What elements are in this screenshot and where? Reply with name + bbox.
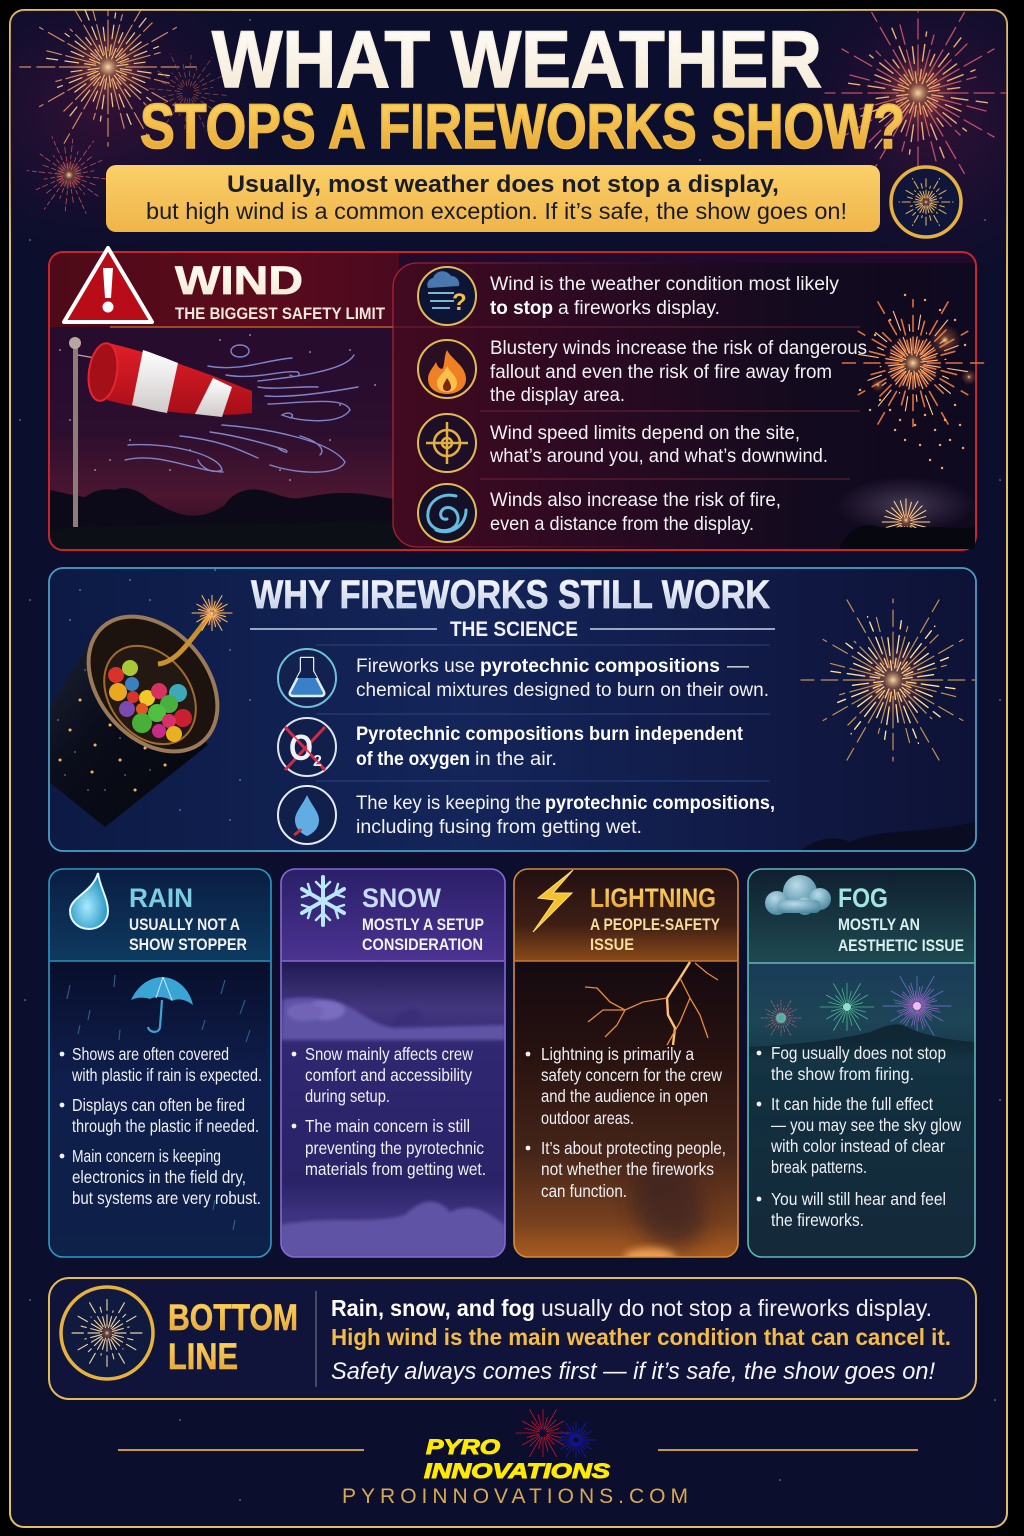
text: rain bullets (60, 1044, 262, 1208)
text: fog bullets: the fireworks. (771, 1210, 864, 1230)
illustration: fireworks in fog (749, 976, 974, 1056)
icon: crosshair (418, 414, 476, 472)
heading: bottom line: BOTTOM (168, 1297, 298, 1338)
text: snow bullets (292, 1044, 486, 1179)
subtitle banner (106, 165, 880, 232)
icon: flask (278, 649, 336, 707)
text: bottom line summary: Rain, snow, and fog (331, 1295, 535, 1321)
icon: no oxygen (278, 718, 336, 776)
icon: wind cloud with question mark: ? (452, 289, 467, 316)
text: science item 2: of the oxygen (356, 749, 470, 770)
heading: fog: AESTHETIC ISSUE (838, 936, 964, 955)
text: wind item 4: even a distance from the display. (490, 514, 754, 535)
icon: warning triangle (64, 248, 152, 322)
icon: rain drop (70, 873, 108, 929)
icon: snowflake (302, 877, 344, 925)
heading: why fireworks still work: THE SCIENCE (450, 618, 578, 641)
text: bottom line summary: High wind is the main weather condition that can cancel it. (331, 1324, 951, 1350)
text: lightning bullets: and the audience in open (541, 1086, 708, 1106)
text: science item 2: Pyrotechnic compositions burn independent (356, 724, 744, 745)
text: wind item 3: Wind speed limits depend on the site, (490, 423, 800, 444)
text: wind item 1: to stop (490, 298, 553, 319)
heading: fog (838, 883, 964, 955)
text: science item 1: pyrotechnic compositions (480, 656, 720, 677)
heading: fog: MOSTLY AN (838, 915, 920, 934)
text: fog bullets: with color instead of clear (770, 1136, 945, 1156)
text: wind item 1: Wind is the weather condition most likely (490, 274, 840, 295)
panel: bottom line (49, 1278, 976, 1399)
text: fog bullets: — you may see the sky glow (771, 1115, 961, 1135)
heading: lightning (590, 883, 721, 954)
heading: why fireworks still work: WHY FIREWORKS STILL WORK (251, 573, 770, 617)
text: rain bullets: with plastic if rain is expected. (71, 1065, 262, 1085)
text: fog bullets: Fog usually does not stop (771, 1043, 946, 1063)
heading: snow: CONSIDERATION (362, 935, 483, 954)
text: lightning bullets (526, 1044, 726, 1201)
text: wind item 1 (490, 274, 840, 319)
heading: bottom line: LINE (168, 1336, 238, 1377)
illustration: wind streaks (125, 345, 358, 472)
text: fog bullets: It can hide the full effect (771, 1094, 933, 1114)
text: snow bullets: comfort and accessibility (305, 1065, 472, 1085)
text: science item 3 (356, 793, 775, 838)
text: snow bullets: during setup. (305, 1086, 390, 1106)
heading: lightning: ISSUE (590, 935, 634, 954)
title: WHAT WEATHER (212, 15, 822, 105)
illustration: lightning strike (585, 962, 718, 1045)
panel: lightning (514, 869, 738, 1268)
icon: flame (418, 340, 476, 398)
text: science item 1: Fireworks use (356, 656, 475, 677)
heading: snow: SNOW (362, 883, 441, 913)
firework: wind panel (835, 295, 985, 552)
icon: wind cloud with question mark (418, 267, 476, 325)
text: bottom line summary (331, 1295, 951, 1385)
text: science item 3: pyrotechnic compositions, (545, 793, 775, 814)
icon: water drop (278, 786, 336, 844)
heading: wind: THE BIGGEST SAFETY LIMIT (175, 304, 386, 323)
panel: rain (49, 869, 271, 1257)
text: lightning bullets: outdoor areas. (541, 1108, 634, 1128)
text: wind item 1: a fireworks display. (558, 298, 720, 319)
text: science item 3: including fusing from getting wet. (356, 817, 642, 838)
text: science item 2: in the air. (475, 749, 557, 770)
heading: lightning: LIGHTNING (590, 883, 716, 913)
heading: snow (362, 883, 484, 954)
footer: website: PYROINNOVATIONS.COM (342, 1485, 688, 1508)
icon: firework medallion (891, 167, 961, 237)
illustration: windsock on pole (69, 337, 252, 527)
text: science item 3: The key is keeping the (356, 793, 541, 814)
heading: snow: MOSTLY A SETUP (362, 915, 484, 934)
panel: why fireworks still work (49, 568, 985, 851)
text: lightning bullets: It’s about protecting people, (541, 1138, 726, 1158)
subtitle banner: Usually, most weather does not stop a display, (227, 171, 779, 198)
icon: umbrella (131, 977, 193, 1032)
text: lightning bullets: can function. (541, 1181, 627, 1201)
panel: snow (281, 869, 505, 1257)
text: wind item 2 (490, 338, 867, 406)
text: snow bullets: materials from getting wet. (305, 1159, 486, 1179)
text: rain bullets: but systems are very robust. (72, 1188, 261, 1208)
text: wind item 2: fallout and even the risk of fire away from (490, 362, 832, 383)
heading: rain: SHOW STOPPER (129, 935, 247, 954)
text: bottom line summary: Safety always comes first — if it’s safe, the show goes on! (331, 1358, 935, 1385)
text: fog bullets: the show from firing. (771, 1064, 914, 1084)
logo: Pyro Innovations: INNOVATIONS (424, 1460, 610, 1483)
text: snow bullets: Snow mainly affects crew (305, 1044, 473, 1064)
text: science item 1 (356, 656, 769, 701)
text: wind item 2: the display area. (490, 385, 625, 406)
text: wind item 2: Blustery winds increase the risk of dangerous (490, 338, 867, 359)
text: wind item 4: Winds also increase the risk of fire, (490, 490, 781, 511)
icon: no oxygen: 2 (313, 753, 322, 770)
text: snow bullets: preventing the pyrotechnic (305, 1138, 484, 1158)
logo: Pyro Innovations: PYRO (426, 1436, 500, 1459)
heading: wind (175, 259, 386, 323)
panel: fog (748, 869, 975, 1257)
text: wind item 3 (489, 423, 828, 467)
heading: why fireworks still work (251, 573, 770, 641)
icon: swirl (418, 484, 476, 542)
title (140, 15, 905, 162)
text: science item 2 (356, 724, 744, 770)
firework: science panel (800, 599, 985, 851)
heading: rain: USUALLY NOT A (129, 915, 240, 934)
heading: fog: FOG (838, 883, 888, 913)
icon: no oxygen: O (289, 727, 313, 768)
icon: lightning bolt (533, 870, 573, 932)
heading: bottom line (168, 1297, 298, 1377)
text: rain bullets: Shows are often covered (72, 1044, 229, 1064)
heading: rain (129, 883, 247, 954)
text: wind item 3: what’s around you, and what’s downwind. (489, 446, 828, 467)
text: fog bullets: You will still hear and feel (771, 1189, 946, 1209)
text: snow bullets: The main concern is still (305, 1116, 470, 1136)
illustration: firework tube with coloured stars (49, 591, 244, 827)
text: rain bullets: through the plastic if needed. (72, 1116, 259, 1136)
icon: bottom line medallion (61, 1287, 153, 1379)
text: wind item 4 (490, 490, 781, 535)
heading: rain: RAIN (129, 883, 193, 913)
text: science item 1: chemical mixtures designed to burn on their own. (356, 680, 769, 701)
logo: Pyro Innovations (424, 1409, 610, 1483)
text: lightning bullets: safety concern for the crew (541, 1065, 722, 1085)
footer: divider rules (118, 1449, 918, 1451)
text: rain bullets: electronics in the field dry, (72, 1167, 246, 1187)
text: rain bullets: Displays can often be fired (72, 1095, 245, 1115)
text: fog bullets: break patterns. (771, 1157, 867, 1177)
text: rain bullets: Main concern is keeping (72, 1146, 221, 1166)
panel: wind (49, 248, 993, 552)
subtitle banner: but high wind is a common exception. If it’s safe, the show goes on! (146, 198, 847, 224)
text: lightning bullets: Lightning is primarily a (541, 1044, 694, 1064)
heading: lightning: A PEOPLE-SAFETY (590, 915, 721, 934)
text: science item 1: — (727, 656, 749, 677)
text: lightning bullets: not whether the fireworks (541, 1159, 714, 1179)
icon: cloud (765, 875, 831, 915)
heading: wind: WIND (175, 259, 303, 303)
text: fog bullets (757, 1043, 961, 1230)
text: bottom line summary: usually do not stop a fireworks display. (541, 1295, 932, 1321)
